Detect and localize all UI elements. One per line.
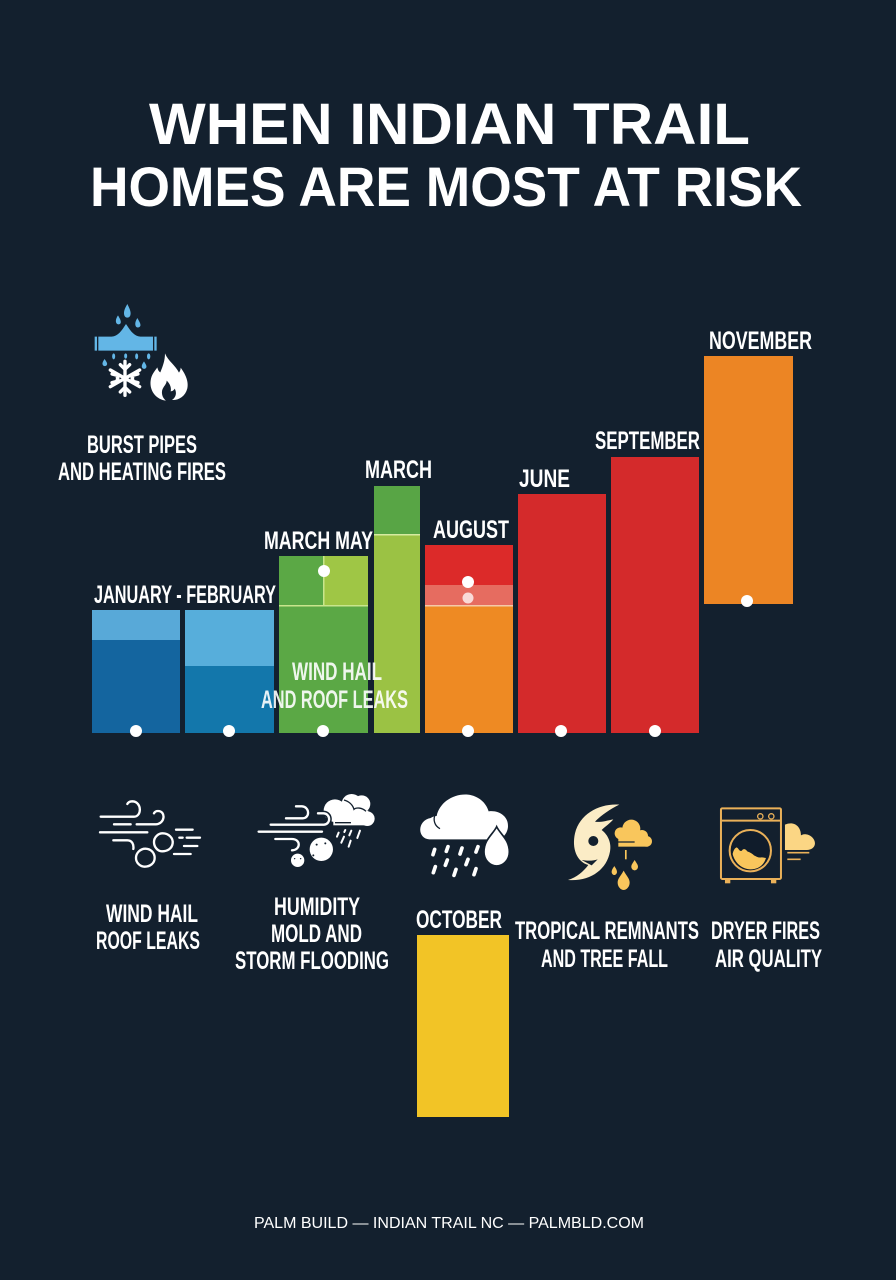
chart: monthly risk bars	[92, 356, 793, 1117]
month labels: SEPTEMBER	[595, 427, 700, 455]
text: burst pipes and heating fires: AND HEATING FIRES	[58, 458, 226, 486]
bar: september	[611, 457, 699, 733]
month labels: JUNE	[519, 465, 570, 493]
icon: wind and hail outline	[100, 801, 200, 867]
text: burst pipes and heating fires	[58, 431, 226, 486]
icon: hurricane with cloud and drops	[568, 805, 652, 890]
text: wind hail roof leaks: ROOF LEAKS	[96, 927, 200, 955]
bar: june	[518, 494, 606, 733]
text: tropical remnants and tree fall: TROPICAL REMNANTS	[515, 917, 699, 945]
text: humidity mold and storm flooding: HUMIDITY	[274, 893, 360, 921]
text: wind hail roof leaks	[96, 900, 200, 955]
bar: march to may	[279, 556, 368, 733]
month labels: OCTOBER	[416, 906, 502, 934]
text: humidity mold and storm flooding	[235, 893, 389, 975]
text: wind hail roof leaks: WIND HAIL	[106, 900, 198, 928]
text: humidity mold and storm flooding: STORM FLOODING	[235, 947, 389, 975]
text: tropical remnants and tree fall	[515, 917, 699, 973]
text: wind hail and roof leaks on bar: AND ROOF LEAKS	[261, 686, 408, 714]
month labels: JANUARY - FEBRUARY	[94, 581, 276, 609]
bar: january	[92, 610, 180, 733]
bar: february	[185, 610, 274, 733]
month labels: AUGUST	[433, 516, 509, 544]
text: dryer fires air quality: DRYER FIRES	[711, 917, 820, 945]
month labels: MARCH	[365, 456, 432, 484]
text: dryer fires air quality: AIR QUALITY	[715, 945, 822, 973]
title	[90, 92, 802, 218]
text: wind hail and roof leaks on bar	[261, 658, 408, 714]
bar: october	[417, 935, 509, 1117]
icon: wind, hail and storm cloud	[259, 794, 375, 867]
footer: PALM BUILD — INDIAN TRAIL NC — PALMBLD.COM	[254, 1215, 644, 1232]
timeline dots	[130, 565, 753, 737]
icon: dryer with heart-shaped cloud	[721, 808, 815, 883]
text: burst pipes and heating fires: BURST PIPES	[87, 431, 197, 459]
month labels	[94, 327, 812, 934]
month labels: NOVEMBER	[709, 327, 812, 355]
bar: november	[704, 356, 793, 604]
bar: march	[374, 486, 420, 733]
title: HOMES ARE MOST AT RISK	[90, 155, 802, 218]
text: dryer fires air quality	[711, 917, 822, 973]
icon: rain cloud with drop	[420, 795, 509, 875]
icon: burst pipe, snowflake and flame	[95, 304, 188, 401]
month labels: MARCH MAY	[264, 527, 373, 555]
text: tropical remnants and tree fall: AND TREE FALL	[541, 945, 668, 973]
text: wind hail and roof leaks on bar: WIND HAIL	[292, 658, 382, 686]
bar: august	[425, 545, 513, 733]
text: humidity mold and storm flooding: MOLD AND	[271, 920, 362, 948]
title: WHEN INDIAN TRAIL	[149, 92, 750, 157]
